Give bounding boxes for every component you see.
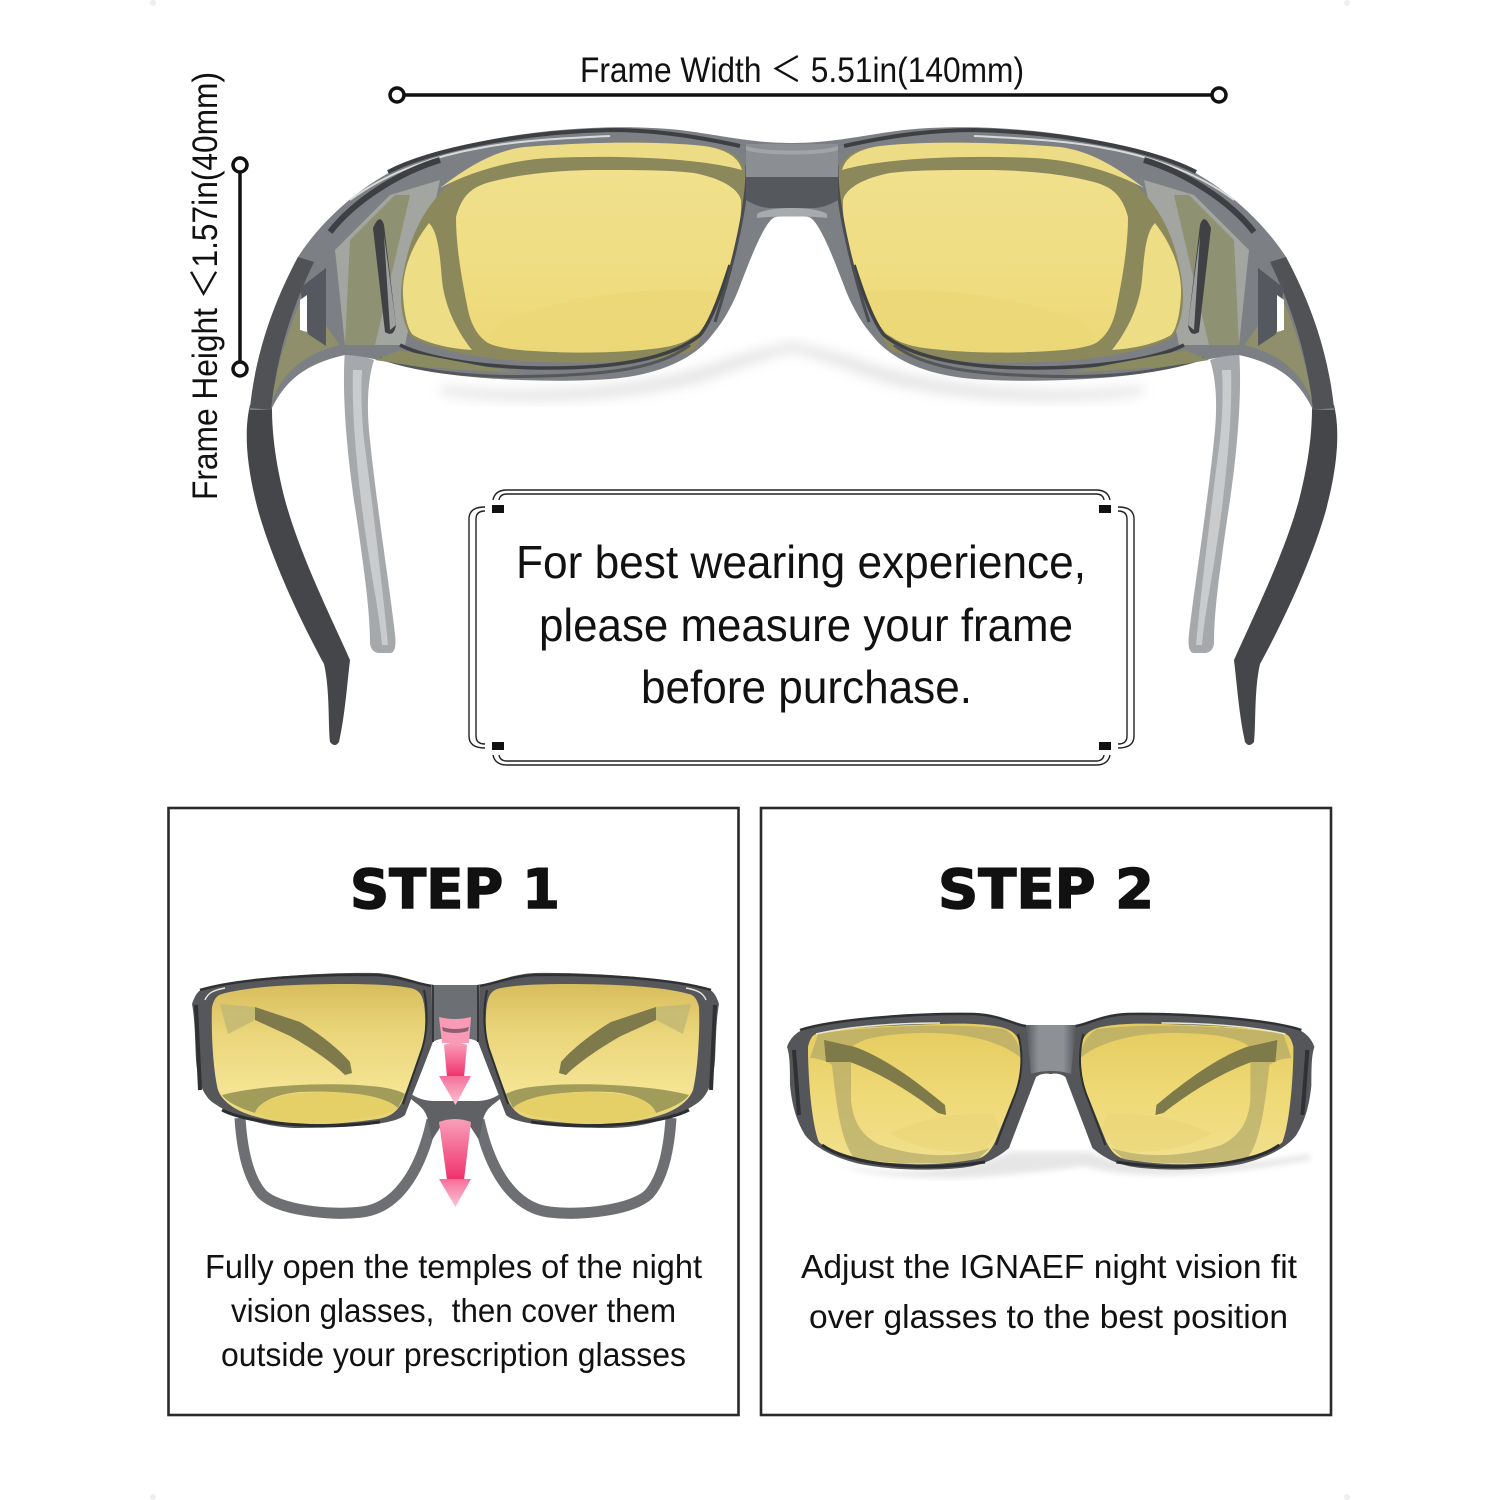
prescription bridge [411, 1094, 500, 1140]
arrow lower [439, 1119, 471, 1207]
frame height measure line [233, 158, 247, 376]
dimension: frame height [186, 72, 247, 500]
lens shadow [441, 342, 1143, 401]
frame width label: Frame Width ＜ 5.51in(140mm) [580, 51, 1024, 90]
bridge [1026, 1025, 1076, 1074]
step 1 description [205, 1248, 702, 1373]
callout text [516, 536, 1086, 713]
step 2 heading: STEP 2 [938, 858, 1154, 921]
step 1 description: Fully open the temples of the night [205, 1248, 702, 1285]
bridge of overglasses [431, 985, 480, 1042]
step 1 glasses illustration [192, 973, 719, 1213]
callout: measure your frame [469, 490, 1134, 765]
left half night vision glasses [192, 973, 456, 1213]
step 1 description: outside your prescription glasses [221, 1336, 686, 1373]
step 2 description: Adjust the IGNAEF night vision fit [801, 1248, 1297, 1285]
left half of frame and lens [247, 127, 792, 745]
callout frame [469, 490, 1134, 765]
arrow upper [439, 1017, 471, 1105]
callout text: before purchase. [641, 661, 972, 713]
step 1 description: vision glasses, then cover them [231, 1292, 676, 1329]
left half glasses [787, 1013, 1052, 1170]
callout corner marks [492, 505, 1111, 750]
right half of frame and lens [792, 127, 1337, 745]
step 2 description [801, 1248, 1297, 1335]
panel: step 1 [168, 808, 738, 1415]
callout text: For best wearing experience, [516, 536, 1086, 588]
step 2 description: over glasses to the best position [809, 1298, 1288, 1335]
main glasses rear view [247, 127, 1337, 745]
step 1 heading: STEP 1 [350, 858, 560, 921]
right half night vision glasses [455, 973, 719, 1213]
frame height label: Frame Height ＜1.57in(40mm) [186, 72, 225, 500]
panel: step 2 [761, 808, 1331, 1415]
nose bridge [746, 144, 838, 218]
step 2 glasses illustration [787, 1013, 1314, 1178]
dimension: frame width [390, 51, 1226, 102]
ground shadow [842, 1152, 1310, 1178]
frame width measure line [390, 88, 1226, 102]
right half glasses [1049, 1013, 1314, 1170]
callout text: please measure your frame [539, 599, 1073, 651]
